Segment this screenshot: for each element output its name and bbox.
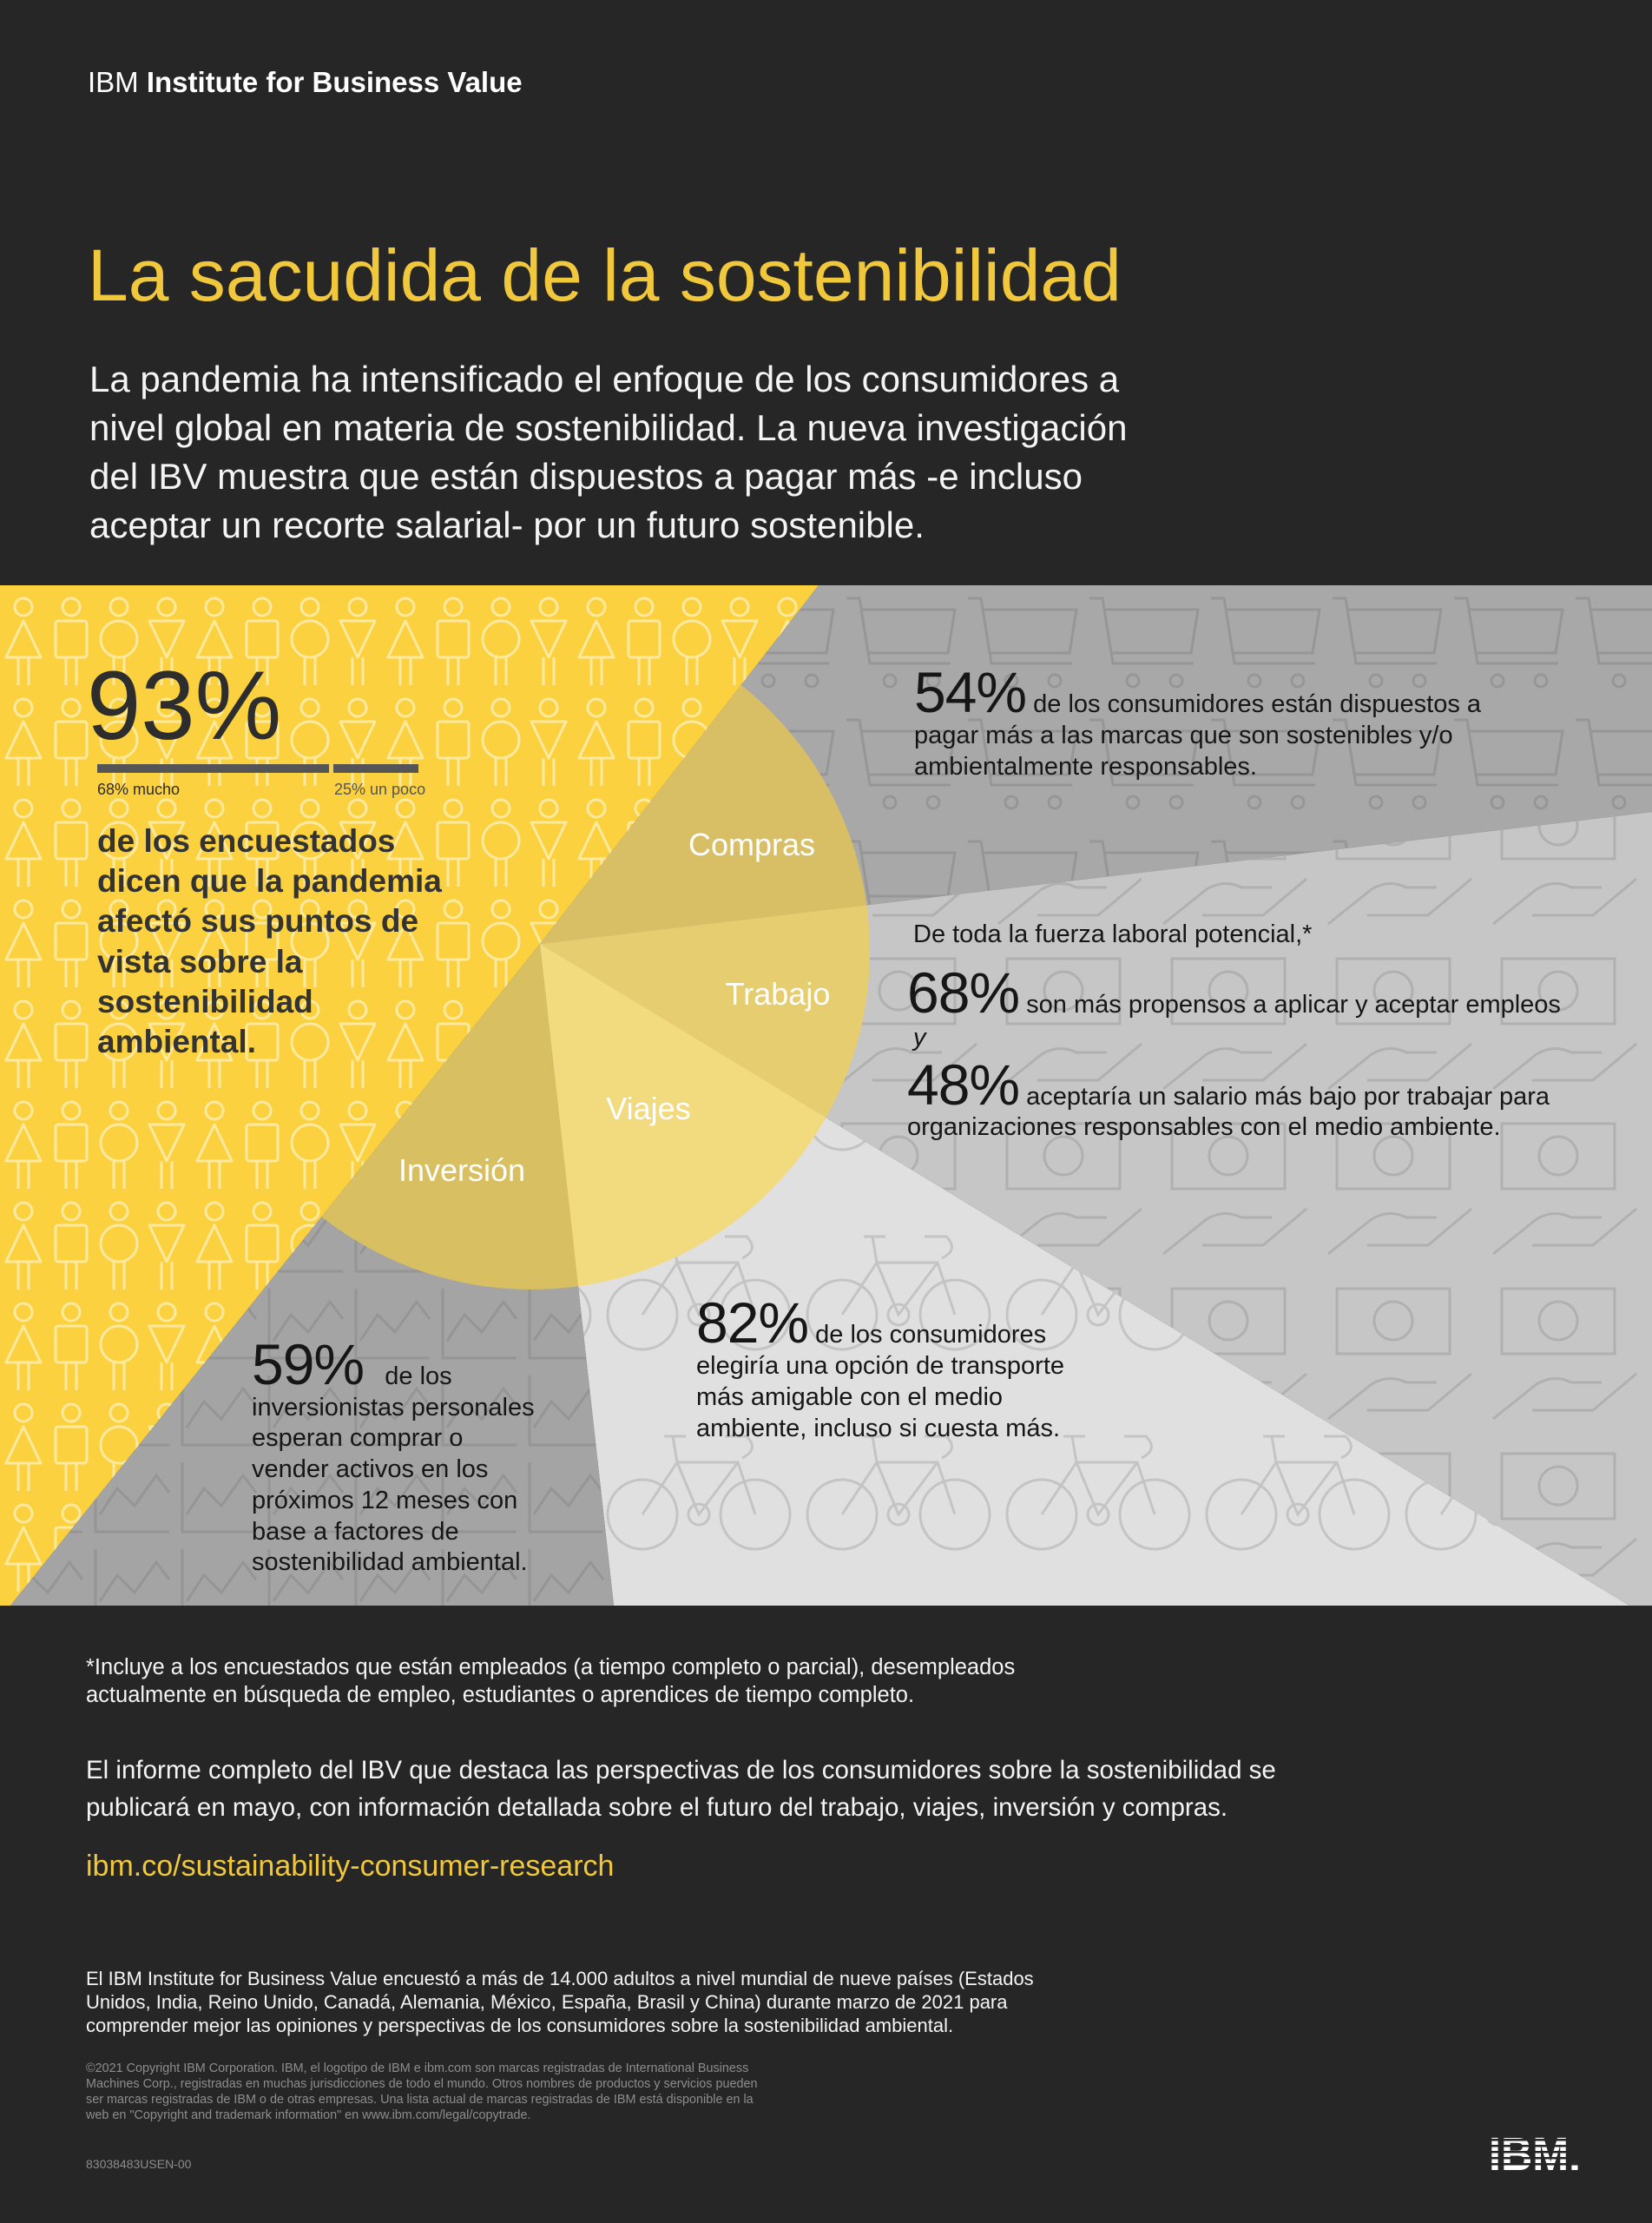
- pie labels: [398, 827, 830, 1188]
- pie labels: Viajes: [606, 1091, 691, 1126]
- region: viajes background: [540, 944, 1629, 1606]
- region: inversion background: [10, 944, 614, 1606]
- stat: trabajo 68% / 48%: y: [913, 1024, 925, 1052]
- methodology: [86, 1968, 1034, 2036]
- stat: 59% inversion: sostenibilidad ambiental.: [252, 1548, 528, 1576]
- subtitle: del IBV muestra que están dispuestos a pagar más -e incluso: [89, 456, 1083, 497]
- stat: 93%: vista sobre la: [97, 944, 303, 980]
- copyright: ser marcas registradas de IBM o de otras empresas. Una lista actual de marcas registradas de IBM está disponible en la: [86, 2093, 754, 2107]
- stat: trabajo 68% / 48%: De toda la fuerza laboral potencial,*: [913, 920, 1312, 948]
- footnote: *Incluye a los encuestados que están empleados (a tiempo completo o parcial), desempleados: [86, 1655, 1015, 1679]
- stat: 59% inversion: esperan comprar o: [252, 1424, 463, 1452]
- link: ibm.co/sustainability-consumer-research: [86, 1850, 614, 1883]
- header brand: IBM Institute for Business Value: [88, 66, 523, 98]
- copyright: Machines Corp., registradas en muchas jurisdicciones de todo el mundo. Otros nombres de productos y servicios pueden: [86, 2077, 757, 2091]
- region: trabajo background: [540, 812, 1652, 1606]
- report note: El informe completo del IBV que destaca las perspectivas de los consumidores sobre la sostenibilidad se: [86, 1756, 1276, 1784]
- stat: 59% inversion: inversionistas personales: [252, 1394, 535, 1422]
- pie labels: Trabajo: [726, 976, 830, 1012]
- methodology: El IBM Institute for Business Value encuestó a más de 14.000 adultos a nivel mundial de nueve países (Estados: [86, 1968, 1034, 1989]
- stat: 54% compras: 54% de los consumidores están dispuestos a: [914, 660, 1481, 724]
- stat: 93%: dicen que la pandemia: [97, 863, 442, 899]
- stat: 82% viajes: [696, 1290, 1064, 1442]
- footnote: [86, 1655, 1015, 1707]
- stat: trabajo 68% / 48%: organizaciones responsables con el medio ambiente.: [907, 1113, 1501, 1141]
- stat: 59% inversion: [252, 1332, 535, 1576]
- stat: 59% inversion: próximos 12 meses con: [252, 1487, 517, 1514]
- stat: 59% inversion: 59% de los: [252, 1332, 452, 1396]
- copyright: ©2021 Copyright IBM Corporation. IBM, el logotipo de IBM e ibm.com son marcas registradas de International Business: [86, 2061, 748, 2075]
- stat: 93%: 68% mucho: [97, 781, 180, 798]
- document code: 83038483USEN-00: [86, 2157, 191, 2171]
- subtitle: [89, 359, 1127, 545]
- stat: 82% viajes: elegiría una opción de transporte: [696, 1352, 1064, 1380]
- subtitle: La pandemia ha intensificado el enfoque de los consumidores a: [89, 359, 1119, 399]
- bar 68/25: [97, 764, 329, 773]
- footnote: actualmente en búsqueda de empleo, estudiantes o aprendices de tiempo completo.: [86, 1683, 914, 1707]
- title: La sacudida de la sostenibilidad: [88, 234, 1122, 316]
- methodology: Unidos, India, Reino Unido, Canadá, Alemania, México, España, Brasil y China) durante marzo de 2021 para: [86, 1991, 1007, 2013]
- region: yellow people: [0, 585, 819, 1606]
- subtitle: nivel global en materia de sostenibilidad. La nueva investigación: [89, 407, 1127, 448]
- stat: 54% compras: pagar más a las marcas que son sostenibles y/o: [914, 722, 1453, 749]
- report note: [86, 1756, 1276, 1822]
- stat: 93%: 25% un poco: [334, 781, 425, 798]
- pie labels: Compras: [688, 827, 815, 862]
- copyright: web en "Copyright and trademark information" en www.ibm.com/legal/copytrade.: [86, 2108, 531, 2122]
- stat: 93%: ambiental.: [97, 1024, 256, 1059]
- stat: 59% inversion: base a factores de: [252, 1518, 459, 1546]
- stat: 59% inversion: vender activos en los: [252, 1455, 488, 1483]
- pie labels: Inversión: [398, 1152, 525, 1188]
- stat: 82% viajes: 82% de los consumidores: [696, 1290, 1046, 1355]
- methodology: comprender mejor las opiniones y perspectivas de los consumidores sobre la sostenibilidad ambiental.: [86, 2015, 953, 2036]
- stat: 93%: 93%: [87, 651, 281, 760]
- pie chart: [321, 685, 870, 1290]
- stat: 82% viajes: más amigable con el medio: [696, 1383, 1003, 1411]
- stat: 82% viajes: ambiente, incluso si cuesta más.: [696, 1415, 1060, 1442]
- stat: 93%: [87, 651, 443, 1059]
- stat: 93%: sostenibilidad: [97, 984, 313, 1019]
- stat: trabajo 68% / 48%: [907, 920, 1561, 1141]
- stat: trabajo 68% / 48%: 68% son más propensos a aplicar y aceptar empleos: [907, 960, 1561, 1025]
- copyright: [86, 2061, 757, 2122]
- subtitle: aceptar un recorte salarial- por un futuro sostenible.: [89, 505, 925, 545]
- stat: 54% compras: [914, 660, 1481, 781]
- graphic panel: [0, 585, 1652, 1606]
- stat: 93%: afectó sus puntos de: [97, 903, 418, 939]
- stat: trabajo 68% / 48%: 48% aceptaría un salario más bajo por trabajar para: [907, 1052, 1550, 1117]
- stat: 54% compras: ambientalmente responsables.: [914, 753, 1257, 781]
- stat: 93%: de los encuestados: [97, 823, 395, 859]
- region: compras background: [540, 585, 1652, 944]
- report note: publicará en mayo, con información detallada sobre el futuro del trabajo, viajes, inversión y compras.: [86, 1793, 1227, 1822]
